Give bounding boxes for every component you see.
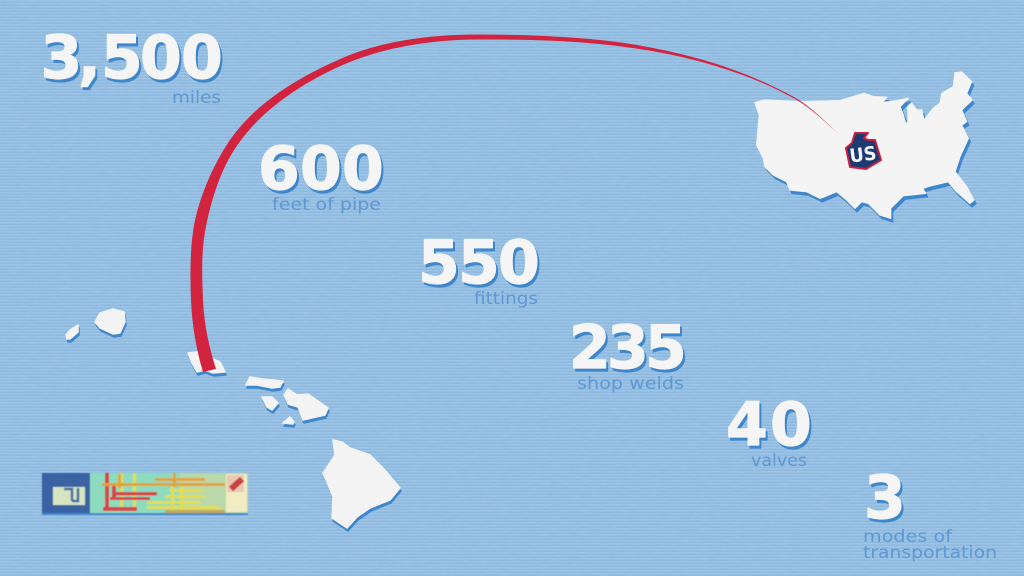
icon: US shield badge: US xyxy=(848,142,878,168)
map: continental United States xyxy=(755,72,976,222)
stat: 3,500 miles: 3,500 xyxy=(40,23,223,93)
stat: 3 modes of transportation: transportation xyxy=(863,543,997,562)
stat: 600 feet of pipe: 600 xyxy=(258,134,384,204)
stat: 3 modes of transportation: 3 xyxy=(864,463,906,533)
stat: 235 shop welds: 235 xyxy=(569,313,687,383)
map: Hawaiian islands xyxy=(66,309,401,531)
thumbnail: pipe layout drawing xyxy=(42,473,248,515)
stat: 600 feet of pipe: 600 xyxy=(260,137,386,207)
stat: 235 shop welds: shop welds xyxy=(577,374,684,393)
stat: 550 fittings: fittings xyxy=(474,289,538,308)
stat: 40 valves: valves xyxy=(751,451,807,470)
stat: 3 modes of transportation: 3 xyxy=(866,466,908,536)
stat: 40 valves: 40 xyxy=(728,393,814,463)
stat: 550 fittings: 550 xyxy=(420,231,542,301)
stat: 40 valves: 40 xyxy=(726,390,812,460)
stat: 235 shop welds: 235 xyxy=(571,316,689,386)
stat: 550 fittings: 550 xyxy=(418,228,540,298)
icon: US shield badge xyxy=(846,133,881,169)
stat: 3,500 miles: 3,500 xyxy=(42,26,225,96)
stat: 3 modes of transportation: modes of xyxy=(863,527,953,546)
stat: 600 feet of pipe: feet of pipe xyxy=(272,195,381,214)
arrow: red route arc from the US to Hawaii xyxy=(190,34,840,372)
stat: 3 modes of transportation xyxy=(863,463,997,562)
stat: 3,500 miles: miles xyxy=(172,88,221,107)
